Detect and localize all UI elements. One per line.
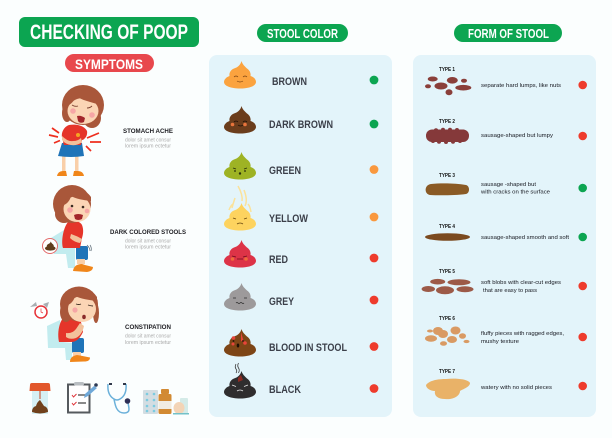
panel: form of stool (413, 55, 596, 417)
heading: stool color (257, 24, 348, 42)
title: CHECKING OF POOP (30, 21, 188, 44)
row: red: RED (269, 254, 288, 266)
row: type 4: sausage-shaped smooth and soft (481, 235, 569, 241)
row: type 1: TYPE 1 (439, 67, 455, 73)
text: dark colored stools (110, 229, 187, 250)
row: type 7 (426, 369, 587, 399)
row: type 6: TYPE 6 (439, 316, 455, 322)
icon: clipboard checklist (68, 382, 98, 412)
text: constipation: CONSTIPATION (125, 324, 171, 331)
row: type 2: TYPE 2 (439, 119, 455, 125)
row: type 2: sausage-shaped but lumpy (481, 133, 553, 139)
text: constipation: dolor sit amet consur (125, 334, 171, 340)
row: dark brown (224, 106, 378, 134)
row: type 1 (425, 67, 587, 95)
row: yellow (224, 186, 378, 230)
text: stomach ache: STOMACH ACHE (123, 128, 174, 135)
row: type 5: that are easy to pass (483, 288, 537, 294)
row: red (224, 240, 378, 268)
illustration: girl on toilet with dark stools (42, 185, 93, 272)
icon: stool sample cup (30, 383, 50, 414)
row: type 4 (425, 224, 587, 241)
row: type 5: soft blobs with clear-cut edges (481, 280, 561, 286)
text: dark colored stools: dolor sit amet consur (125, 238, 171, 244)
text: stomach ache: lorem ipsum ectetur (125, 144, 171, 150)
row: blood in stool: BLOOD IN STOOL (269, 342, 347, 354)
row: type 4: TYPE 4 (439, 224, 456, 230)
heading: stool color: STOOL COLOR (267, 27, 338, 41)
title (19, 17, 199, 47)
row: type 3: sausage -shaped but (481, 182, 536, 188)
row: type 3: TYPE 3 (439, 173, 455, 179)
row: brown (224, 61, 378, 88)
row: type 6: fluffy pieces with ragged edges, (481, 331, 564, 337)
row: type 3 (426, 173, 587, 196)
row: yellow: YELLOW (269, 213, 309, 225)
heading: form of stool: FORM OF STOOL (468, 27, 549, 41)
icon: alarm clock (30, 302, 49, 318)
row: type 7: watery with no solid pieces (480, 385, 552, 391)
row: type 3: with cracks on the surface (480, 190, 550, 196)
row: grey: GREY (269, 296, 295, 308)
text: dark colored stools: lorem ipsum ectetur (125, 244, 171, 250)
panel: stool color (209, 55, 392, 417)
row: grey (224, 283, 378, 310)
icon: stethoscope (108, 384, 130, 413)
heading: symptoms: SYMPTOMS (75, 56, 143, 72)
text: constipation (125, 324, 171, 346)
text: constipation: lorem ipsum ectetur (125, 340, 171, 346)
row: brown: BROWN (272, 76, 307, 88)
row: type 5 (422, 269, 587, 294)
illustration: girl with constipation (30, 286, 99, 362)
row: blood in stool (224, 329, 378, 356)
row: green: GREEN (269, 165, 301, 177)
row: dark brown: DARK BROWN (269, 119, 333, 131)
row: green (224, 152, 378, 180)
row: black (224, 363, 378, 398)
row: black: BLACK (269, 384, 301, 396)
illustration: girl with stomach ache (49, 85, 104, 176)
row: type 6: mushy texture (481, 339, 519, 345)
row: type 7: TYPE 7 (439, 369, 455, 375)
row: type 6 (425, 316, 587, 346)
text: dark colored stools: DARK COLORED STOOLS (110, 229, 187, 236)
text: stomach ache: dolor sit amet consur (125, 138, 171, 144)
icon: medicines (143, 389, 189, 414)
heading: form of stool (454, 24, 562, 42)
text: stomach ache (123, 128, 174, 150)
row: type 2 (426, 119, 587, 144)
row: type 5: TYPE 5 (439, 269, 455, 275)
row: type 1: separate hard lumps, like nuts (481, 83, 561, 89)
